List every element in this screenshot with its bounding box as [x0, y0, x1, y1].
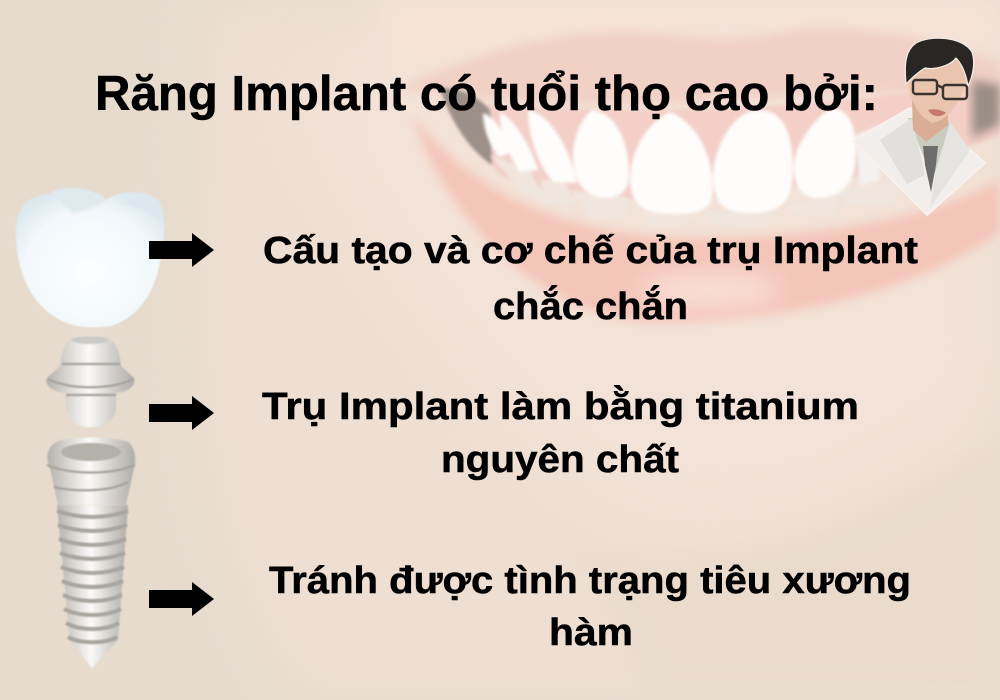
- upper teeth: [483, 108, 880, 214]
- text block: bone loss: hàm: [549, 612, 633, 654]
- doctor hair: [905, 38, 974, 86]
- doctor coat: [853, 108, 985, 215]
- lower teeth: [490, 155, 900, 226]
- doctor glasses: [913, 80, 967, 99]
- lip highlight: [640, 272, 780, 308]
- text block: titanium material: Trụ Implant làm bằng titanium: [262, 384, 859, 428]
- screw threads: [57, 511, 128, 642]
- mouth shadow: [440, 88, 492, 165]
- text block: implant structure: chắc chắn: [493, 284, 688, 328]
- illustration: dental crown: [16, 188, 164, 327]
- text block: bone loss: Tránh được tình trạng tiêu xương: [269, 560, 911, 602]
- illustration: implant abutment: [46, 336, 134, 427]
- arrow: screw: [149, 582, 214, 616]
- doctor neck and face: [912, 100, 948, 142]
- text block: bone loss: [269, 560, 911, 654]
- text block: implant structure: [263, 230, 918, 328]
- text block: titanium material: nguyên chất: [441, 439, 679, 481]
- arrow: abutment: [149, 396, 214, 430]
- illustration: implant screw: [47, 438, 135, 668]
- neck shadow under jaw: [560, 440, 1000, 700]
- upper lip: [395, 28, 1000, 108]
- text block: titanium material: [262, 384, 859, 481]
- title: Răng Implant có tuổi thọ cao bởi:: [95, 67, 878, 121]
- arrow: crown: [149, 233, 214, 267]
- lower lip: [412, 115, 1000, 322]
- gums: [440, 78, 1000, 199]
- illustration: doctor portrait: [853, 38, 985, 215]
- text block: implant structure: Cấu tạo và cơ chế của trụ Implant: [263, 230, 918, 272]
